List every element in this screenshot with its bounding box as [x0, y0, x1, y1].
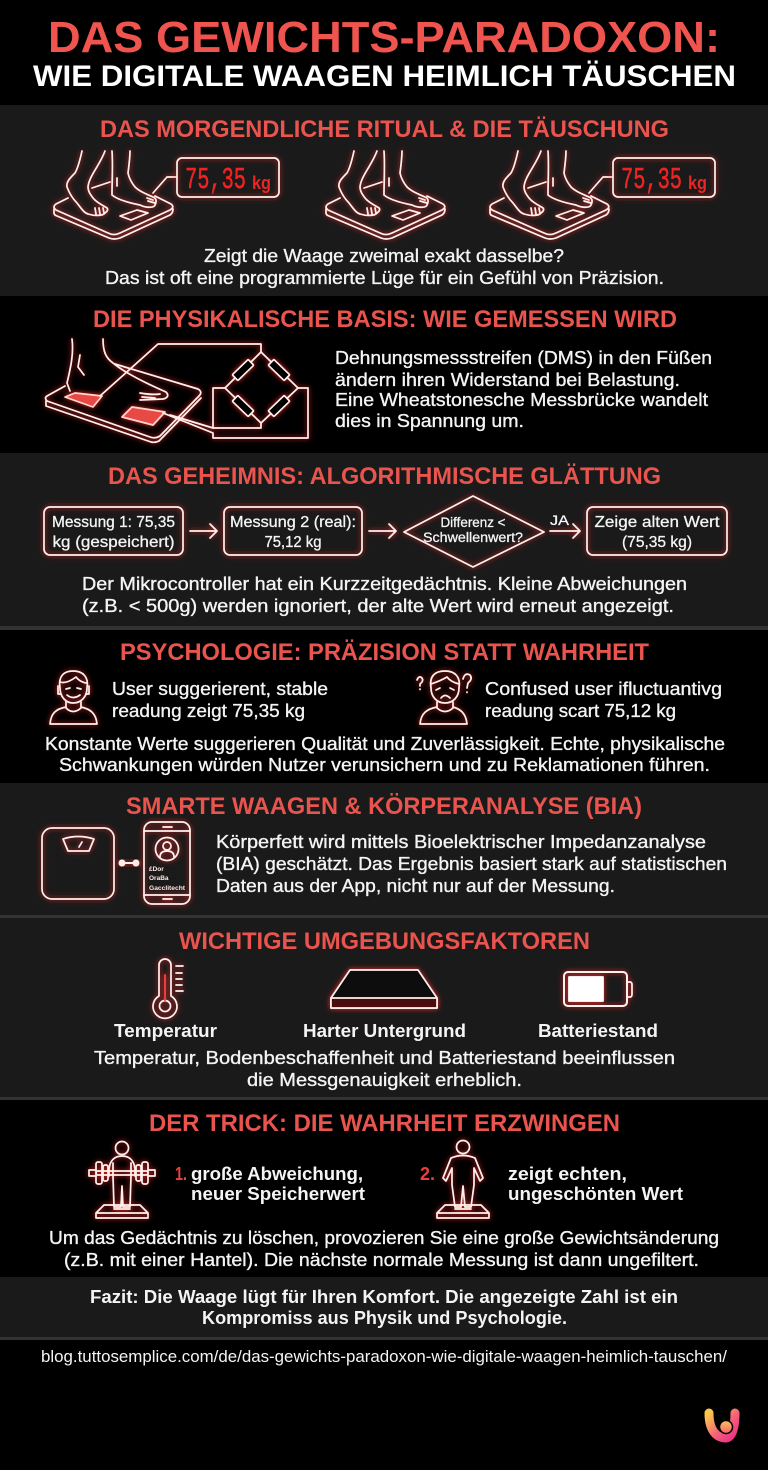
text: stable reading: readung zeigt 75,35 kg: [112, 700, 305, 721]
panel: psychologie: [0, 630, 768, 783]
text: microcontroller explanation: Der Mikrocontroller hat ein Kurzzeitgedächtnis. Kleine Abweichungen: [82, 573, 687, 594]
heading: umgebungsfaktoren: WICHTIGE UMGEBUNGSFAKTOREN: [179, 928, 590, 955]
text: BIA explanation: (BIA) geschätzt. Das Ergebnis basiert stark auf statistischen: [216, 853, 727, 874]
text: BIA explanation: [216, 831, 727, 896]
text: fazit: Fazit: Die Waage lügt für Ihren Komfort. Die angezeigte Zahl ist ein: [90, 1286, 678, 1307]
logo: [709, 1413, 735, 1438]
panel: smarte waagen: [0, 783, 768, 918]
text: fluctuating reading: [485, 678, 722, 721]
panel: der trick: [0, 1100, 768, 1277]
icon: person standing on scale: [437, 1140, 489, 1218]
heading: basis: DIE PHYSIKALISCHE BASIS: WIE GEMESSEN WIRD: [93, 306, 677, 333]
diagram: foot on scale with wheatstone bridge: [46, 339, 308, 442]
icon: bathroom scale: [42, 828, 114, 899]
panel: umgebungsfaktoren: [0, 918, 768, 1100]
title: DAS GEWICHTS-PARADOXON:: [48, 13, 720, 62]
flow decision: differenz: Differenz <: [440, 515, 506, 530]
text: step 2: ungeschönten Wert: [508, 1183, 683, 1204]
icon: battery: [564, 972, 632, 1006]
icon: scale with feet 1: [54, 151, 176, 239]
display: reading 2: 75,35: [621, 163, 682, 198]
flow step: messung 2: [224, 507, 362, 555]
text: trick explanation: Um das Gedächtnis zu löschen, provozieren Sie eine große Gewichtsänderung: [49, 1227, 719, 1248]
text: trick explanation: (z.B. mit einer Hantel). Die nächste normale Messung ist dann ungefiltert.: [64, 1249, 699, 1270]
text: ritual caption: Zeigt die Waage zweimal exakt dasselbe?: [204, 245, 564, 266]
text: environment explanation: die Messgenauigkeit erheblich.: [247, 1069, 522, 1090]
text: microcontroller explanation: (z.B. < 500g) werden ignoriert, der alte Wert wird erneut angezeigt.: [82, 595, 674, 616]
flow decision: differenz: Schwellenwert?: [423, 530, 523, 545]
text: environment explanation: Temperatur, Bodenbeschaffenheit und Batteriestand beeinflussen: [94, 1047, 675, 1068]
heading: geheimnis: DAS GEHEIMNIS: ALGORITHMISCHE GLÄTTUNG: [108, 463, 661, 490]
icon: confused user: [417, 671, 471, 724]
panel: physikalische basis: [0, 296, 768, 453]
icon: smartphone with profile: [144, 822, 190, 904]
heading: smarte waagen: SMARTE WAAGEN & KÖRPERANALYSE (BIA): [126, 793, 642, 820]
number 2: 2.: [420, 1163, 435, 1184]
label: temperatur: Temperatur: [114, 1020, 217, 1041]
text: BIA explanation: Körperfett wird mittels Bioelektrischer Impedanzanalyse: [216, 831, 706, 852]
flow step: messung 2: Messung 2 (real):: [230, 514, 356, 531]
icon: smartphone with profile: £Dor: [149, 866, 164, 873]
text: fluctuating reading: Confused user ifluctuantivg: [485, 678, 722, 699]
text: stable reading: User suggerierent, stable: [112, 678, 328, 699]
text: BIA explanation: Daten aus der App, nicht nur auf der Messung.: [216, 875, 615, 896]
icon: scale with feet 2: [326, 151, 445, 239]
text: strain gauges explanation: ändern ihren Widerstand bei Belastung.: [335, 369, 680, 390]
text: stable reading: [112, 678, 328, 721]
flow step: alter wert: Zeige alten Wert: [594, 514, 720, 531]
text: psychology explanation: Konstante Werte suggerieren Qualität und Zuverlässigkeit. Echte, physikalische: [45, 733, 725, 754]
icon: hard floor slab: [331, 970, 437, 1008]
text: strain gauges explanation: dies in Spannung um.: [335, 410, 524, 431]
number 1: 1.: [175, 1163, 187, 1184]
source url: blog.tuttosemplice.com/de/das-gewichts-paradoxon-wie-digitale-waagen-heimlich-tauschen/: [41, 1348, 727, 1366]
title: WIE DIGITALE WAAGEN HEIMLICH TÄUSCHEN: [33, 60, 736, 93]
flow step: alter wert: (75,35 kg): [622, 534, 692, 551]
icon: scale with feet 3: [490, 151, 612, 239]
label: batteriestand: Batteriestand: [538, 1020, 658, 1041]
panel: morgendliches ritual: [0, 105, 768, 296]
arrow 2: [369, 524, 396, 538]
text: strain gauges explanation: Eine Wheatstonesche Messbrücke wandelt: [335, 389, 709, 410]
icon: thermometer: [153, 959, 183, 1018]
flow step: messung 2: 75,12 kg: [264, 534, 322, 551]
heading: trick: DER TRICK: DIE WAHRHEIT ERZWINGEN: [149, 1110, 620, 1137]
text: step 1: [191, 1163, 365, 1204]
text: psychology explanation: Schwankungen würden Nutzer verunsichern und zu Reklamationen führen.: [59, 754, 710, 775]
flow decision: differenz: [404, 496, 544, 567]
display: reading 1: 75,35: [185, 163, 246, 198]
text: strain gauges explanation: [335, 347, 712, 431]
label: harter untergrund: Harter Untergrund: [303, 1020, 466, 1041]
text: ritual caption: Das ist oft eine programmierte Lüge für ein Gefühl von Präzision.: [105, 267, 664, 288]
text: trick explanation: [49, 1227, 719, 1270]
flow step: alter wert: [587, 507, 727, 555]
text: step 1: neuer Speicherwert: [191, 1183, 365, 1204]
display: reading 1: kg: [252, 173, 271, 193]
text: step 2: [508, 1163, 683, 1204]
display: reading 2: kg: [688, 173, 707, 193]
icon: happy user: [50, 671, 97, 724]
title: [33, 13, 736, 93]
heading: psychologie: PSYCHOLOGIE: PRÄZISION STATT WAHRHEIT: [120, 639, 649, 666]
flow step: messung 1: [44, 507, 183, 555]
panel: fazit: [0, 1277, 768, 1340]
text: strain gauges explanation: Dehnungsmessstreifen (DMS) in den Füßen: [335, 347, 712, 368]
text: step 1: große Abweichung,: [191, 1163, 363, 1184]
text: step 2: zeigt echten,: [508, 1163, 627, 1184]
label: JA: JA: [550, 512, 570, 528]
flow step: messung 1: kg (gespeichert): [52, 534, 174, 551]
icon: smartphone with profile: Gacclitecht: [149, 885, 186, 892]
text: fazit: Kompromiss aus Physik und Psychologie.: [202, 1307, 567, 1328]
flow step: messung 1: Messung 1: 75,35: [52, 514, 175, 531]
icon: bluetooth link: [119, 860, 139, 866]
text: environment explanation: [94, 1047, 675, 1090]
text: psychology explanation: [45, 733, 725, 775]
icon: person lifting barbell on scale: [89, 1142, 155, 1218]
text: ritual caption: [105, 245, 664, 288]
text: fluctuating reading: readung scart 75,12 kg: [485, 700, 676, 721]
arrow 1: [190, 524, 217, 538]
heading: ritual: DAS MORGENDLICHE RITUAL & DIE TÄUSCHUNG: [100, 116, 669, 143]
text: microcontroller explanation: [82, 573, 687, 616]
arrow 3: [550, 524, 580, 538]
text: fazit: [90, 1286, 678, 1328]
panel: algorithmische glättung: [0, 453, 768, 630]
icon: smartphone with profile: OraBa: [149, 875, 169, 882]
